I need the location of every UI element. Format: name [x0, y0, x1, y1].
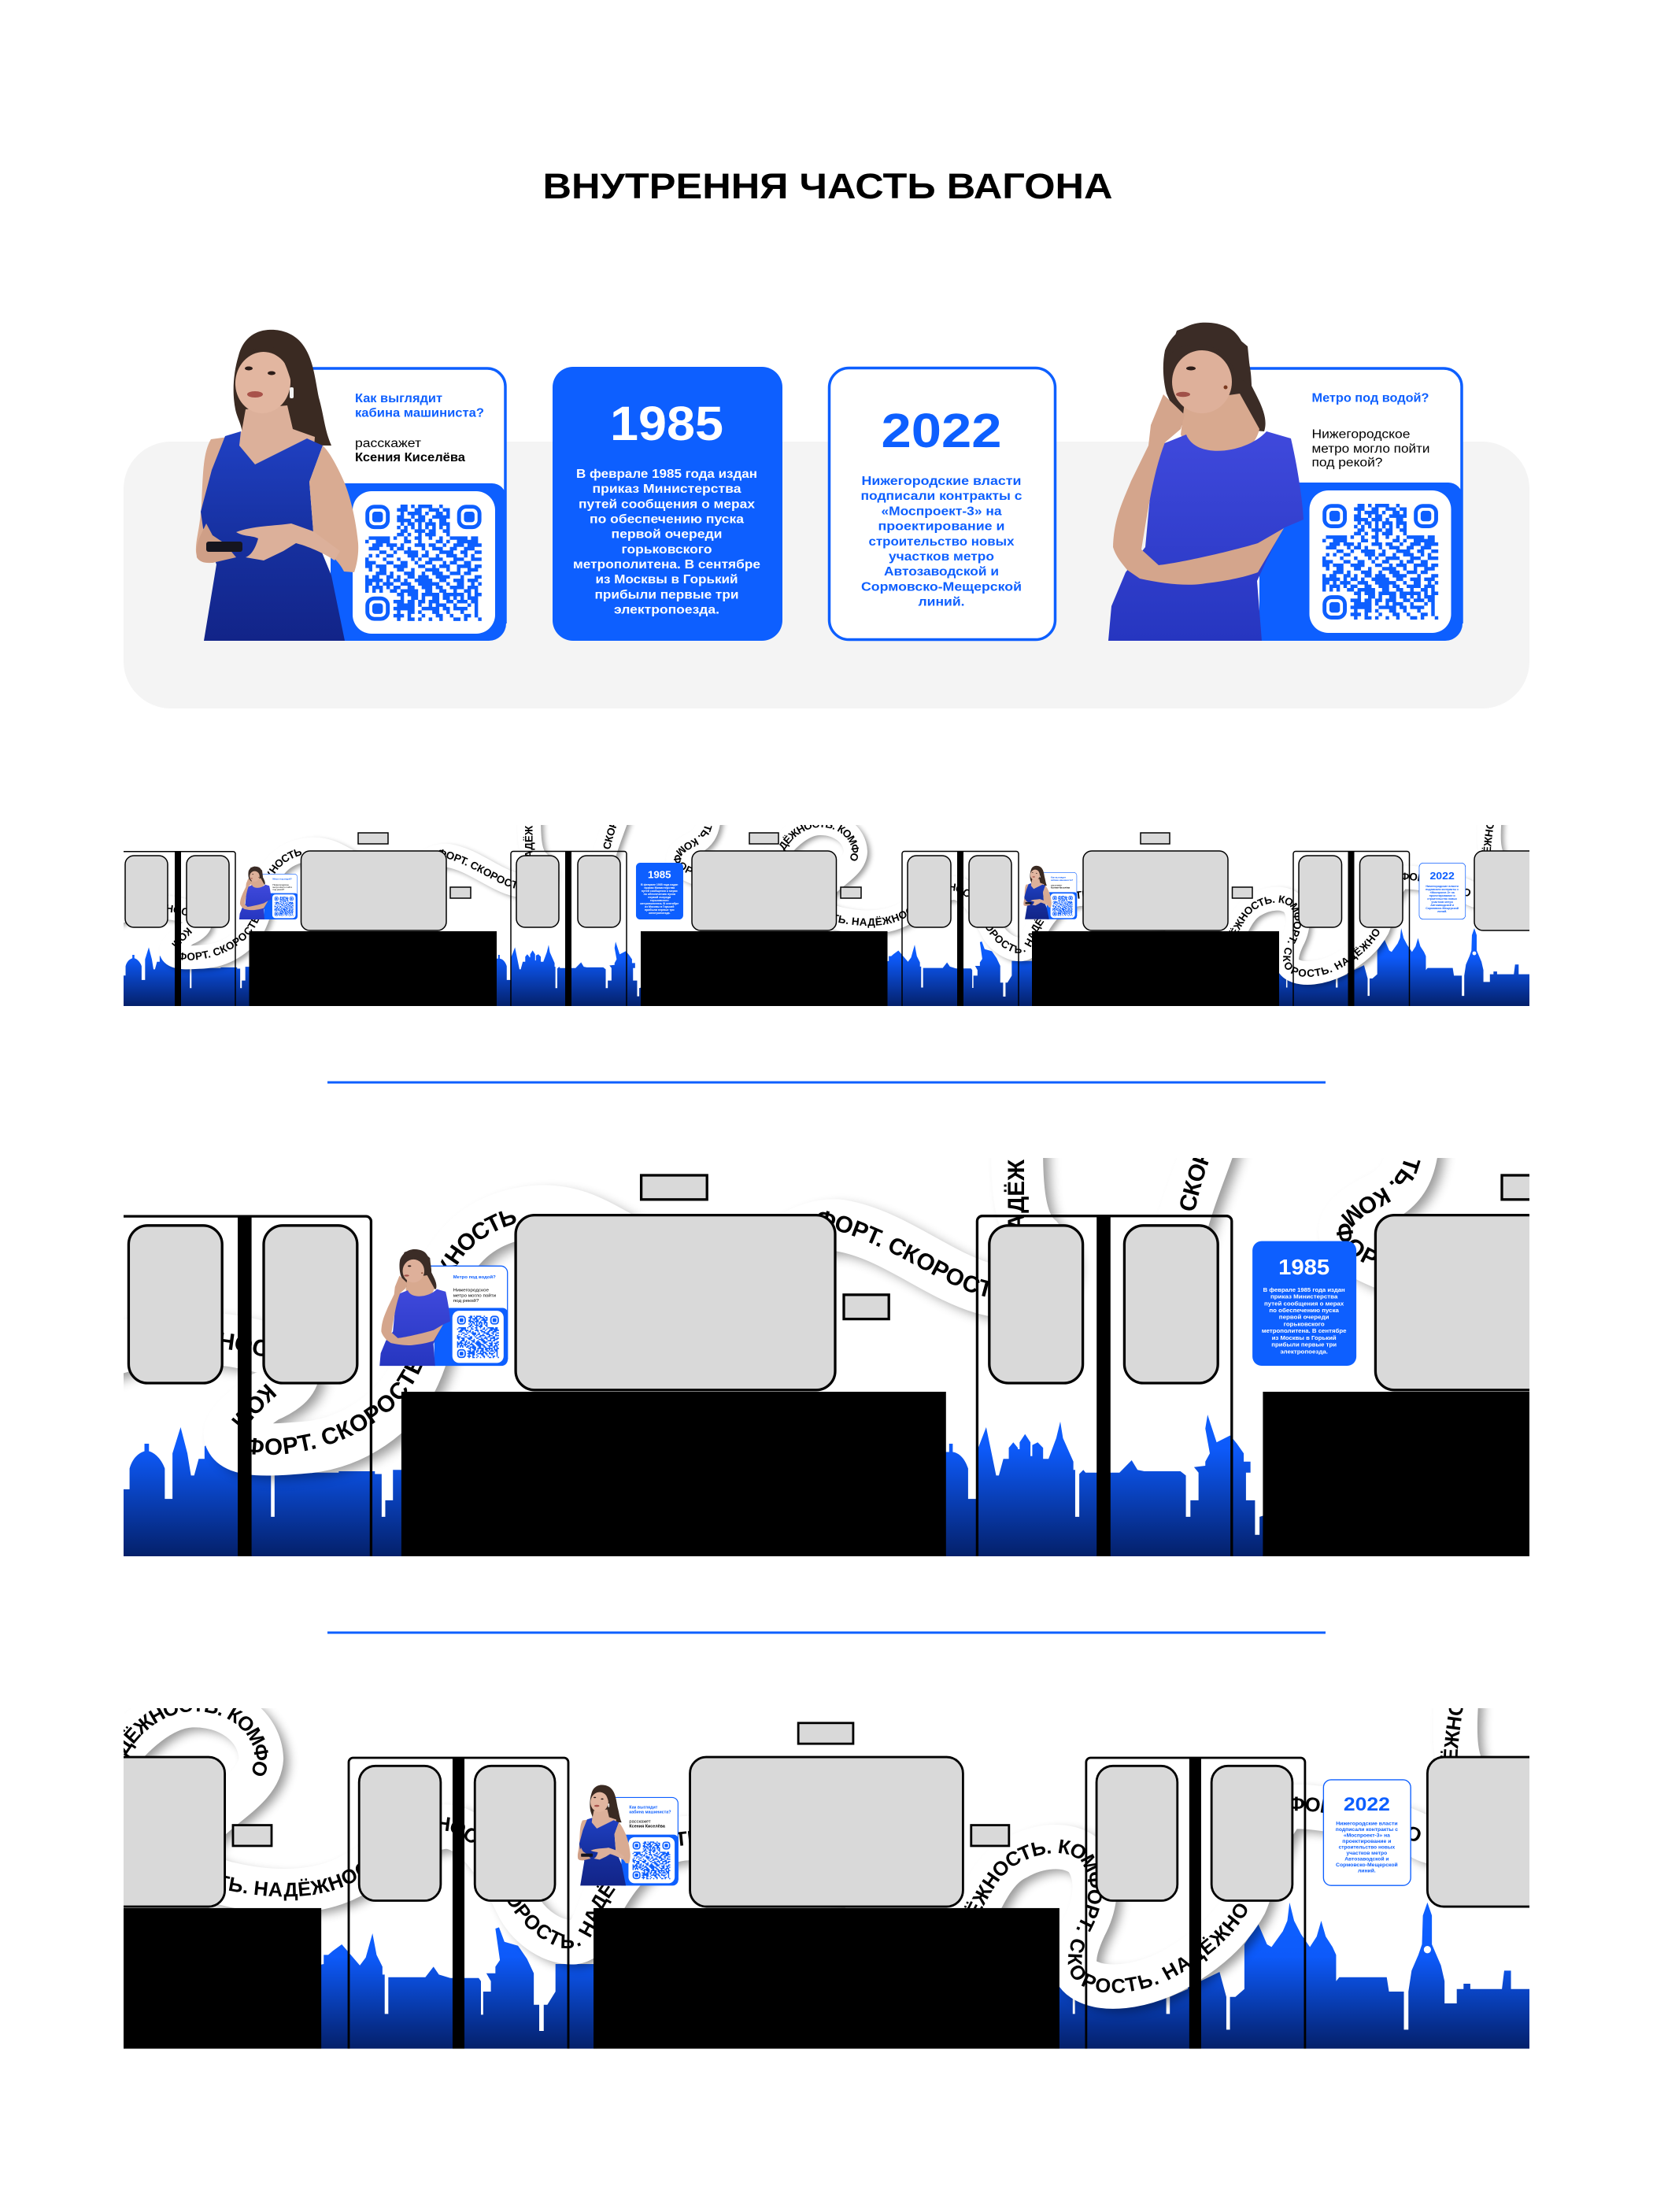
year: 2022 — [882, 404, 1001, 457]
fact text: первой очереди — [611, 527, 723, 542]
mini poster: 1985 — [636, 863, 683, 919]
fact text: горьковского — [622, 543, 712, 557]
presenter photo illustration — [196, 330, 358, 641]
QR block — [331, 483, 506, 641]
divider 2 — [327, 1631, 1326, 1634]
card outline — [830, 368, 1055, 639]
wave slogan text: ДЁЖНОС — [168, 904, 186, 916]
mini poster: cabin — [1023, 866, 1077, 919]
presenter credit — [355, 437, 465, 464]
fact text: из Москвы в Горький — [595, 573, 738, 586]
black seat blocks — [249, 931, 1279, 1006]
wave slogan text: ТЬ. КОМФОР — [671, 823, 715, 877]
card: 1985 fact — [553, 367, 782, 641]
QR block — [1259, 483, 1463, 641]
card: 2022 fact — [830, 368, 1055, 639]
wave slogan text: ЁЖНОС — [1481, 812, 1497, 853]
card outline — [311, 368, 505, 623]
fact text: Автозаводской и — [884, 565, 999, 579]
presenter credit: Ксения Киселёва — [355, 451, 465, 464]
enlarged left part of the strip — [96, 1124, 1653, 1556]
QR code — [365, 506, 482, 620]
wave slogan text: ДЁЖНОСТЬ. КОМФО — [776, 817, 862, 864]
year: 1985 — [610, 397, 723, 450]
question text: Метро под водой? — [1311, 392, 1429, 405]
wave slogan text — [168, 825, 1494, 977]
body text: под рекой? — [1311, 457, 1383, 469]
question text: Как выглядит — [355, 392, 442, 405]
wave slogan text: ТЬ — [1074, 888, 1090, 901]
fact text: приказ Министерства — [592, 483, 741, 496]
QR white plate — [353, 491, 495, 634]
wave slogan text: ЁЖНОСТЬ. КОМФОРТ. СКОРОСТЬ. НАДЁЖНО — [1227, 893, 1383, 979]
fact text: Сормовско-Мещерской — [861, 581, 1022, 594]
fact text: путей сообщения о мерах — [579, 498, 755, 512]
body text — [1311, 428, 1429, 469]
wave slogan text: СКОРО — [601, 812, 623, 850]
fact text: проектирование и — [878, 520, 1004, 534]
question text: кабина машиниста? — [355, 406, 484, 420]
fact text: подписали контракты с — [861, 490, 1022, 503]
door group 1 — [118, 852, 235, 1006]
mini poster: 2022 — [1419, 863, 1466, 919]
wave slogan text: ФОРТ. СКОРОСТЬ — [436, 846, 527, 892]
fact text: по обеспечению пуска — [590, 513, 744, 526]
wave slogan text: НОСТЬ. — [320, 934, 361, 945]
wave slogan text: АДЁЖНО — [523, 810, 534, 858]
fact text: участков метро — [889, 550, 994, 564]
presenter photo illustration — [1108, 323, 1304, 641]
title: ВНУТРЕННЯ ЧАСТЬ ВАГОНА — [543, 166, 1113, 206]
presenter credit: расскажет — [355, 437, 421, 450]
fact text — [573, 468, 760, 617]
full train wall strip — [124, 825, 1529, 1006]
wave band shadow — [113, 817, 1501, 975]
fact text: строительство новых — [869, 535, 1015, 549]
door group 4 — [1293, 852, 1409, 1006]
fact text: электропоезда. — [614, 603, 719, 617]
QR code — [1322, 505, 1438, 618]
large side windows — [301, 851, 1619, 930]
wave slogan text: КОМ — [172, 927, 192, 946]
fact text: прибыли первые три — [595, 589, 738, 601]
QR white plate — [1310, 490, 1451, 633]
fact text: В феврале 1985 года издан — [576, 468, 757, 481]
wave slogan text: ФОРТ. СКОРОСТЬ. НАДЁЖНОСТЬ — [181, 849, 302, 960]
panel: grey background — [124, 442, 1529, 708]
card: underwater metro question with presenter and QR — [1108, 323, 1463, 641]
divider 1 — [327, 1082, 1326, 1083]
card body — [311, 368, 505, 639]
wave slogan text: ТЬ. НАДЁЖНОС — [831, 904, 916, 928]
fact text: «Моспроект-3» на — [882, 505, 1002, 518]
fact text: линий. — [918, 595, 965, 609]
fact text: Нижегородские власти — [861, 475, 1022, 488]
question text — [355, 392, 484, 420]
mini poster: underwater metro — [239, 867, 298, 919]
body text: Нижегородское — [1311, 428, 1411, 441]
card background — [553, 367, 782, 641]
card: cabin question with presenter and QR — [196, 330, 506, 641]
wave slogan text: ОРОСТЬ. НАДЁ — [982, 916, 1046, 956]
fact text — [861, 475, 1022, 609]
card outline — [1248, 368, 1462, 623]
city skyline with blue gradient — [122, 825, 1529, 1006]
body text: метро могло пойти — [1311, 442, 1429, 456]
wave slogan text: ФОРТ. СКОРО — [1400, 870, 1473, 899]
card body — [1248, 368, 1461, 639]
enlarged right part of the strip — [0, 1680, 1653, 2049]
door group 3 — [902, 852, 1019, 1006]
strip 1 left edge mask — [118, 825, 124, 1006]
door group 2 — [511, 852, 627, 1006]
small vents — [358, 833, 1252, 898]
wave slogan text: НОСТ — [948, 880, 979, 904]
fact text: метрополитена. В сентябре — [573, 558, 760, 571]
white wave band — [110, 815, 1498, 973]
